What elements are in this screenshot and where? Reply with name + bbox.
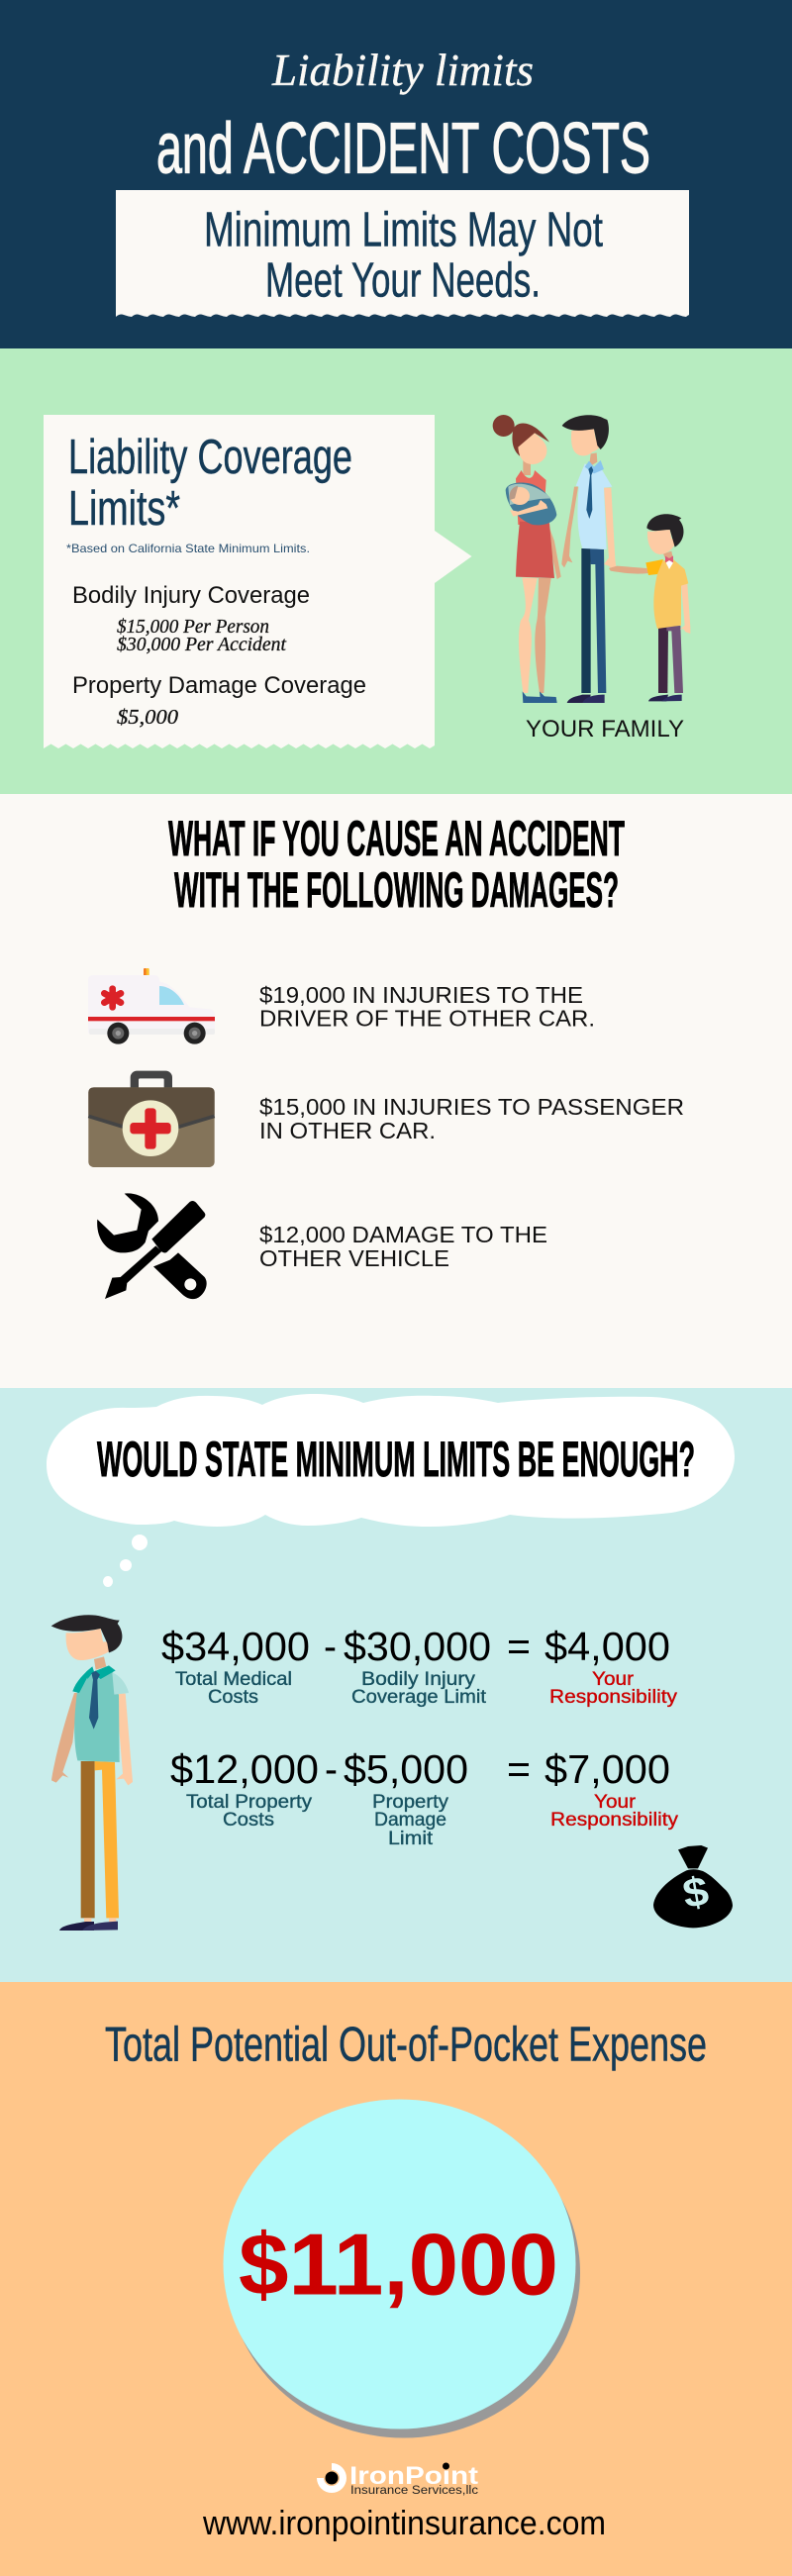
icon: money bag: $ bbox=[679, 1867, 712, 1917]
equation: property: $12,000 bbox=[170, 1746, 319, 1792]
subtitle banner: Meet Your Needs. bbox=[265, 253, 541, 307]
equation: medical: Responsibility bbox=[549, 1686, 677, 1708]
equation: medical: Total Medical bbox=[175, 1668, 292, 1690]
logo: IronPoint bbox=[317, 2462, 479, 2497]
equation: property: Your bbox=[594, 1791, 637, 1813]
speech card: $30,000 Per Accident bbox=[117, 634, 286, 655]
circle with total amount: $11,000 bbox=[239, 2216, 558, 2313]
text: vehicle damage: $12,000 DAMAGE TO THE bbox=[259, 1222, 547, 1247]
equation: medical bbox=[161, 1624, 677, 1708]
equation: property: = bbox=[507, 1746, 531, 1792]
equation: medical: $34,000 bbox=[161, 1624, 310, 1669]
panel: state minimum comparison bbox=[0, 1388, 792, 1982]
equation: medical: Bodily Injury bbox=[361, 1668, 475, 1690]
logo: IronPoint: IronPoint bbox=[349, 2462, 479, 2490]
text: driver injuries: DRIVER OF THE OTHER CAR. bbox=[259, 1006, 595, 1032]
text: vehicle damage: OTHER VEHICLE bbox=[259, 1245, 449, 1271]
subtitle banner bbox=[116, 190, 689, 317]
heading bbox=[168, 811, 625, 918]
logo: IronPoint: Insurance Services,llc bbox=[350, 2485, 478, 2497]
panel: accident damages bbox=[0, 794, 792, 1388]
text: driver injuries bbox=[259, 982, 595, 1032]
text: passenger injuries bbox=[259, 1094, 684, 1143]
panel: liability coverage limits bbox=[0, 348, 792, 794]
equation: property: Property bbox=[372, 1791, 448, 1813]
speech card: Property Damage Coverage bbox=[72, 672, 366, 699]
equation: medical: $30,000 bbox=[344, 1624, 491, 1669]
speech card: Bodily Injury Coverage bbox=[72, 582, 310, 609]
speech card bbox=[44, 415, 471, 748]
title: script line: Liability limits bbox=[271, 45, 534, 95]
icon: money bag bbox=[653, 1845, 733, 1928]
equation: property: $7,000 bbox=[544, 1746, 670, 1792]
website url: www.ironpointinsurance.com bbox=[202, 2505, 606, 2542]
text: driver injuries: $19,000 IN INJURIES TO THE bbox=[259, 982, 583, 1008]
equation: property: Responsibility bbox=[550, 1809, 678, 1831]
equation: property: Costs bbox=[223, 1809, 274, 1831]
equation: medical: Your bbox=[592, 1668, 635, 1690]
panel: header bbox=[0, 0, 792, 348]
equation: property bbox=[170, 1746, 678, 1849]
circle with total amount bbox=[224, 2099, 580, 2437]
speech card: Limits* bbox=[68, 482, 180, 536]
icon: ambulance bbox=[88, 968, 215, 1044]
equation: property: Limit bbox=[388, 1828, 434, 1849]
equation: medical: = bbox=[507, 1624, 531, 1669]
equation: property: Total Property bbox=[186, 1791, 312, 1813]
equation: property: - bbox=[325, 1746, 338, 1792]
subtitle banner: Minimum Limits May Not bbox=[204, 204, 603, 257]
equation: property: $5,000 bbox=[344, 1746, 468, 1792]
icon: medical bag bbox=[88, 1071, 215, 1167]
equation: medical: Coverage Limit bbox=[351, 1686, 487, 1708]
speech card: $5,000 bbox=[117, 705, 179, 729]
speech card: $15,000 Per Person bbox=[117, 616, 269, 638]
illustration: family bbox=[493, 415, 690, 703]
speech card: Liability Coverage bbox=[68, 431, 352, 484]
equation: medical: Costs bbox=[208, 1686, 258, 1708]
panel: total expense bbox=[0, 1982, 792, 2576]
text: passenger injuries: IN OTHER CAR. bbox=[259, 1118, 436, 1143]
illustration: thinking man bbox=[51, 1615, 133, 1931]
thought cloud bbox=[47, 1394, 735, 1587]
equation: property: Damage bbox=[374, 1809, 446, 1831]
speech card: *Based on California State Minimum Limits. bbox=[66, 542, 310, 555]
icon: crossed tools bbox=[97, 1193, 207, 1299]
equation: medical: - bbox=[324, 1624, 337, 1669]
label: your family: YOUR FAMILY bbox=[526, 716, 684, 743]
equation: medical: $4,000 bbox=[544, 1624, 670, 1669]
text: vehicle damage bbox=[259, 1222, 547, 1271]
text: passenger injuries: $15,000 IN INJURIES TO PASSENGER bbox=[259, 1094, 684, 1120]
